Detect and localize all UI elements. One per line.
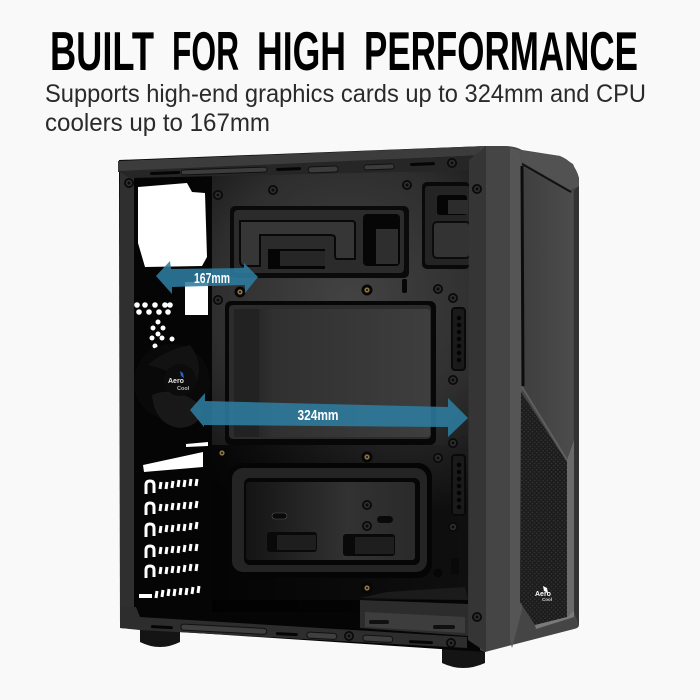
- front logo: [535, 586, 552, 602]
- rear panel cutouts: [134, 183, 210, 598]
- right drive bay: [422, 182, 470, 269]
- front logo: Cool: [542, 597, 552, 602]
- screws and standoffs: [213, 180, 459, 594]
- top rail: [118, 146, 486, 188]
- left rear flange: [120, 168, 134, 628]
- front silhouette: [480, 146, 579, 652]
- rear fan: Aero: [168, 378, 184, 385]
- ventilation holes: [134, 302, 180, 356]
- upper face plate: [522, 168, 573, 460]
- title: HIGH: [257, 20, 346, 82]
- motherboard tray: [212, 160, 470, 612]
- power supply opening: [138, 183, 207, 267]
- expansion vents: [452, 308, 465, 515]
- power supply shroud bracket: [360, 587, 468, 636]
- title: BUILT: [50, 20, 154, 82]
- subtitle: coolers up to 167mm: [45, 109, 270, 137]
- right side strip: [567, 440, 574, 617]
- arrow: 324mm graphics card clearance: 324mm: [298, 407, 338, 424]
- computer case: [118, 146, 579, 668]
- middle recessed panel: [225, 301, 436, 445]
- rear fan: Cool: [177, 386, 190, 392]
- front pillar: [468, 146, 522, 652]
- arrow: 167mm cooler clearance: 167mm: [194, 270, 230, 287]
- top chamfer: [519, 150, 579, 190]
- front logo: Aero: [535, 591, 551, 598]
- case feet: [140, 626, 485, 668]
- mesh vent: [520, 392, 567, 625]
- diagonal highlight: [522, 387, 567, 460]
- expansion slots: [139, 442, 208, 598]
- arrow: 324mm graphics card clearance: [190, 393, 468, 437]
- small rear opening: [185, 282, 208, 315]
- bottom rail: [120, 607, 467, 648]
- lower cutout panel: [228, 463, 432, 578]
- front panel: [519, 150, 579, 629]
- top groove: [522, 164, 571, 192]
- subtitle: Supports high-end graphics cards up to 324mm and CPU: [45, 80, 646, 108]
- upper cutout panel: [230, 206, 409, 278]
- lower edge highlight: [535, 610, 574, 629]
- arrow: 167mm cooler clearance: [156, 261, 258, 294]
- title: FOR: [172, 20, 239, 82]
- case interior: [119, 146, 486, 652]
- rear fan: [134, 344, 210, 428]
